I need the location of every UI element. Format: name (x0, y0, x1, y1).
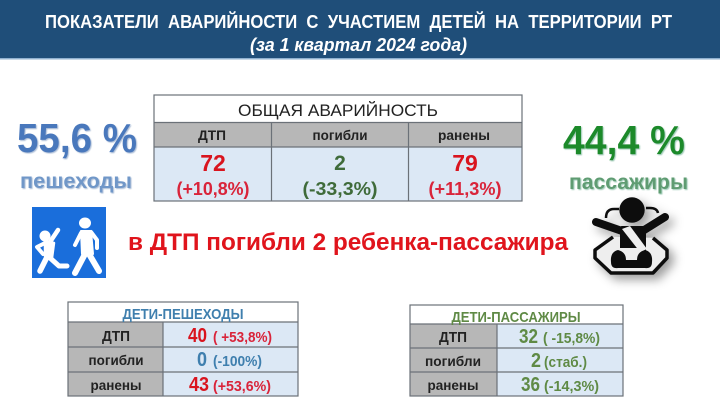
column headers: погибли (312, 127, 368, 143)
value: killed: (-33,3%) (302, 179, 378, 199)
column headers: ДТП (198, 127, 226, 143)
header banner (0, 0, 720, 60)
row: injured: (+53,6%) (213, 378, 271, 395)
row: killed (88, 349, 262, 371)
value: accidents: (+10,8%) (176, 179, 250, 199)
row: killed: 2 (531, 350, 541, 372)
passengers share: 44,4 % (563, 117, 685, 163)
row: accidents: 40 (188, 325, 207, 347)
value: killed (302, 152, 378, 199)
row: accidents: 32 (519, 326, 538, 348)
column headers: ранены (438, 127, 490, 143)
row: injured: (-14,3%) (544, 378, 599, 395)
table title: ДЕТИ-ПЕШЕХОДЫ (122, 306, 244, 323)
column headers (198, 127, 490, 143)
table title: ДЕТИ-ПАССАЖИРЫ (452, 309, 580, 326)
row: killed: погибли (88, 352, 144, 368)
row: accidents: ( -15,8%) (543, 330, 600, 347)
pedestrians share: 55,6 % (17, 115, 137, 161)
callout: two child passengers killed: в ДТП погибли 2 ребенка-пассажира (128, 229, 569, 256)
row: accidents (102, 325, 272, 347)
row: killed: (стаб.) (544, 354, 587, 371)
value: injured: 79 (452, 150, 478, 176)
row: accidents: ДТП (439, 329, 467, 346)
pedestrians label: пешеходы (20, 170, 132, 193)
row: accidents: ДТП (102, 328, 130, 345)
row: accidents: ( +53,8%) (213, 329, 272, 346)
table: overall accident rate (154, 95, 522, 201)
row: killed: (-100%) (213, 353, 262, 370)
row: injured: 36 (521, 374, 540, 396)
row: injured: 43 (189, 374, 209, 396)
row: injured: ранены (428, 377, 478, 393)
row: accidents (439, 326, 600, 348)
icon: pedestrians road sign (32, 207, 106, 278)
table: child passengers (410, 305, 623, 396)
row: injured (90, 374, 271, 396)
value: accidents: 72 (200, 150, 226, 176)
value: injured: (+11,3%) (428, 179, 502, 199)
value: injured (428, 150, 502, 199)
subtitle: (за 1 квартал 2024 года) (250, 35, 467, 55)
icon: child seat with belt (595, 197, 667, 273)
row: killed: погибли (425, 353, 481, 369)
row: killed (425, 350, 587, 372)
table: child pedestrians (68, 302, 298, 396)
passengers label: пассажиры (569, 171, 688, 194)
value: accidents (176, 150, 250, 199)
row: injured: ранены (90, 377, 142, 393)
value: killed: 2 (334, 152, 346, 175)
row: killed: 0 (197, 349, 207, 371)
row: injured (428, 374, 599, 396)
title: ПОКАЗАТЕЛИ АВАРИЙНОСТИ С УЧАСТИЕМ ДЕТЕЙ НА ТЕРРИТОРИИ РТ (45, 11, 672, 32)
table title: ОБЩАЯ АВАРИЙНОСТЬ (238, 101, 438, 120)
